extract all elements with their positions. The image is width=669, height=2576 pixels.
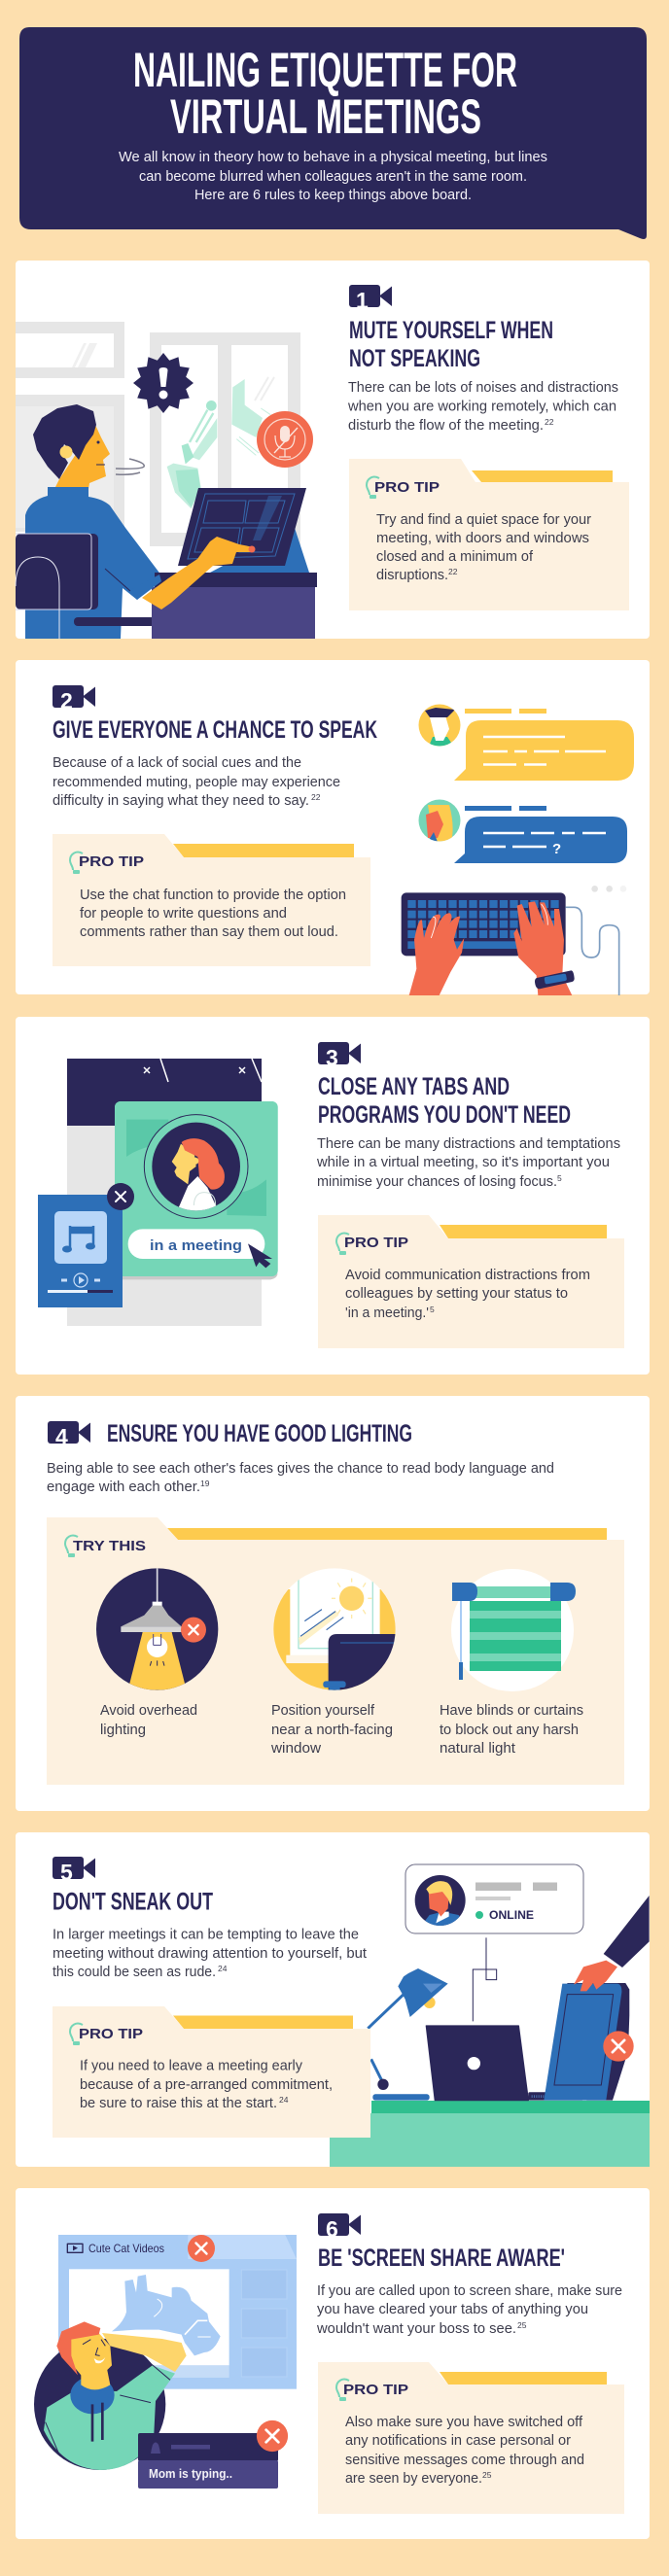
body text (347, 380, 618, 434)
step number icon (349, 285, 392, 313)
body text (316, 2283, 622, 2337)
pro tip card: Avoid communication distractions from (345, 1268, 590, 1283)
caption: to block out any harsh (440, 1723, 579, 1738)
illustration: chat bubbles (418, 704, 634, 863)
body text: you have cleared your tabs of anything you (317, 2302, 588, 2317)
body text: 19 (200, 1479, 210, 1488)
heading: DON'T SNEAK OUT (53, 1888, 213, 1915)
intro text: Here are 6 rules to keep things above board. (194, 188, 472, 203)
icon: muted microphone (257, 411, 313, 468)
body text: disturb the flow of the meeting. (348, 418, 544, 434)
heading: NOT SPEAKING (349, 345, 480, 372)
intro text (119, 150, 547, 203)
status card: ONLINE (489, 1908, 534, 1922)
step number icon (53, 685, 95, 714)
pro tip card: meeting, with doors and windows (376, 531, 589, 546)
caption: Position yourself (271, 1703, 375, 1719)
illustration: hands on keyboard (402, 886, 626, 995)
caption (100, 1703, 197, 1738)
icon: blinds (451, 1569, 576, 1691)
pro tip card: If you need to leave a meeting early (80, 2059, 303, 2074)
pro tip card: Use the chat function to provide the option (80, 888, 346, 903)
pro tip card: PRO TIP (343, 2382, 408, 2398)
step number icon: 1 (356, 288, 369, 313)
caption (270, 1703, 393, 1757)
pro tip card: because of a pre-arranged commitment, (80, 2077, 333, 2093)
illustration: in a meeting window (38, 1059, 278, 1326)
pro tip card: PRO TIP (79, 853, 144, 870)
pro tip card (53, 834, 370, 966)
step number icon: 4 (55, 1424, 68, 1449)
pro tip card: 24 (279, 2095, 289, 2105)
body text: this could be seen as rude. (53, 1965, 216, 1980)
avatar (415, 1875, 466, 1926)
icon: window and sun (272, 1568, 397, 1693)
pro tip card: PRO TIP (374, 479, 440, 496)
heading: MUTE YOURSELF WHEN (349, 317, 553, 344)
body text: 25 (517, 2320, 527, 2330)
body text: difficulty in saying what they need to say. (53, 793, 309, 809)
pro tip card (53, 2006, 370, 2138)
body text: recommended muting, people may experience (53, 775, 340, 790)
heading (318, 1073, 571, 1129)
caption (440, 1703, 583, 1757)
panel 3: close tabs (16, 1017, 650, 1375)
body text (47, 1461, 554, 1495)
caption: lighting (100, 1723, 146, 1738)
pro tip card (349, 459, 629, 610)
body text: while in a virtual meeting, so it's important you (316, 1155, 610, 1170)
pro tip card: for people to write questions and (80, 906, 287, 922)
caption: natural light (440, 1741, 515, 1757)
illustration: cat video and embarrassed man (34, 2235, 297, 2489)
heading: PROGRAMS YOU DON'T NEED (318, 1101, 571, 1129)
caption: window (270, 1741, 322, 1757)
heading: GIVE EVERYONE A CHANCE TO SPEAK (53, 716, 377, 744)
caption: Have blinds or curtains (440, 1703, 583, 1719)
pro tip card: 'in a meeting.' (345, 1305, 429, 1321)
body text: wouldn't want your boss to see. (316, 2321, 516, 2337)
body text (53, 755, 340, 809)
title: VIRTUAL MEETINGS (170, 89, 481, 144)
pro tip card: closed and a minimum of (376, 549, 534, 565)
pro tip card: PRO TIP (344, 1235, 408, 1251)
body text: engage with each other. (47, 1479, 200, 1495)
step number icon (53, 1857, 95, 1885)
status text: in a meeting (150, 1237, 242, 1254)
intro text: We all know in theory how to behave in a physical meeting, but lines (119, 150, 547, 165)
body text: 22 (311, 792, 321, 802)
body text: There can be lots of noises and distractions (348, 380, 618, 396)
try this card (47, 1517, 624, 1785)
icon: overhead lamp (96, 1568, 218, 1690)
body text: There can be many distractions and temptations (317, 1136, 620, 1152)
heading (349, 317, 553, 372)
pro tip card: 25 (482, 2470, 492, 2480)
body text: 5 (557, 1173, 562, 1183)
title (133, 43, 517, 144)
body text (53, 1927, 367, 1980)
icon: close (107, 1183, 134, 1210)
notification (138, 2433, 278, 2489)
pro tip card (318, 2362, 624, 2514)
step number icon: 6 (326, 2216, 338, 2242)
panel 2: give everyone a chance (16, 660, 650, 995)
music player card (38, 1195, 123, 1307)
pro tip card: 22 (448, 567, 458, 576)
body text: minimise your chances of losing focus. (317, 1174, 557, 1190)
pro tip card: PRO TIP (79, 2026, 143, 2042)
step number icon: 2 (60, 688, 73, 714)
pro tip card: sensitive messages come through and (345, 2453, 584, 2468)
header banner (19, 27, 647, 239)
caption: Avoid overhead (100, 1703, 197, 1719)
body text: 24 (218, 1964, 228, 1973)
pro tip card (318, 1215, 624, 1348)
icon: alert badge (133, 353, 194, 413)
step number icon (48, 1421, 90, 1449)
heading: BE 'SCREEN SHARE AWARE' (318, 2245, 565, 2272)
step number icon: 5 (60, 1860, 73, 1885)
pro tip card: Also make sure you have switched off (345, 2415, 583, 2430)
body text: Because of a lack of social cues and the (53, 755, 301, 771)
try this card: TRY THIS (73, 1538, 146, 1554)
status card (405, 1864, 583, 1933)
panel 1: mute yourself (16, 261, 650, 639)
caption: near a north-facing (271, 1723, 393, 1738)
step number icon (318, 2213, 361, 2242)
pro tip card: are seen by everyone. (345, 2471, 482, 2487)
body text: If you are called upon to screen share, make sure (317, 2283, 622, 2299)
step number icon (318, 1042, 361, 1070)
illustration: desk with laptop and status card (330, 1864, 650, 2167)
notification: Mom is typing.. (149, 2466, 232, 2481)
pro tip card: comments rather than say them out loud. (80, 924, 338, 940)
heading: ENSURE YOU HAVE GOOD LIGHTING (107, 1420, 412, 1447)
pro tip card: 5 (430, 1305, 435, 1314)
illustration: man at touchscreen (16, 322, 317, 639)
step number icon: 3 (326, 1045, 338, 1070)
panel 4: good lighting (16, 1396, 650, 1811)
body text: Being able to see each other's faces gives the chance to read body language and (47, 1461, 554, 1477)
intro text: can become blurred when colleagues aren't in the same room. (139, 169, 527, 185)
body text: 22 (545, 417, 554, 427)
panel 5: don't sneak out (16, 1832, 650, 2167)
pro tip card: colleagues by setting your status to (345, 1286, 568, 1302)
panel 6: screen share aware (16, 2188, 650, 2539)
body text: meeting without drawing attention to yourself, but (53, 1946, 367, 1962)
pro tip card: Try and find a quiet space for your (376, 512, 591, 528)
illustration: chat bubbles: ? (552, 841, 561, 857)
heading: CLOSE ANY TABS AND (318, 1073, 510, 1100)
pro tip card: be sure to raise this at the start. (80, 2096, 277, 2111)
pro tip card: disruptions. (376, 568, 448, 583)
body text: In larger meetings it can be tempting to leave the (53, 1927, 359, 1942)
pro tip card: any notifications in case personal or (345, 2433, 571, 2449)
window title: Cute Cat Videos (88, 2242, 164, 2255)
body text (316, 1136, 620, 1190)
body text: when you are working remotely, which can (347, 399, 616, 414)
